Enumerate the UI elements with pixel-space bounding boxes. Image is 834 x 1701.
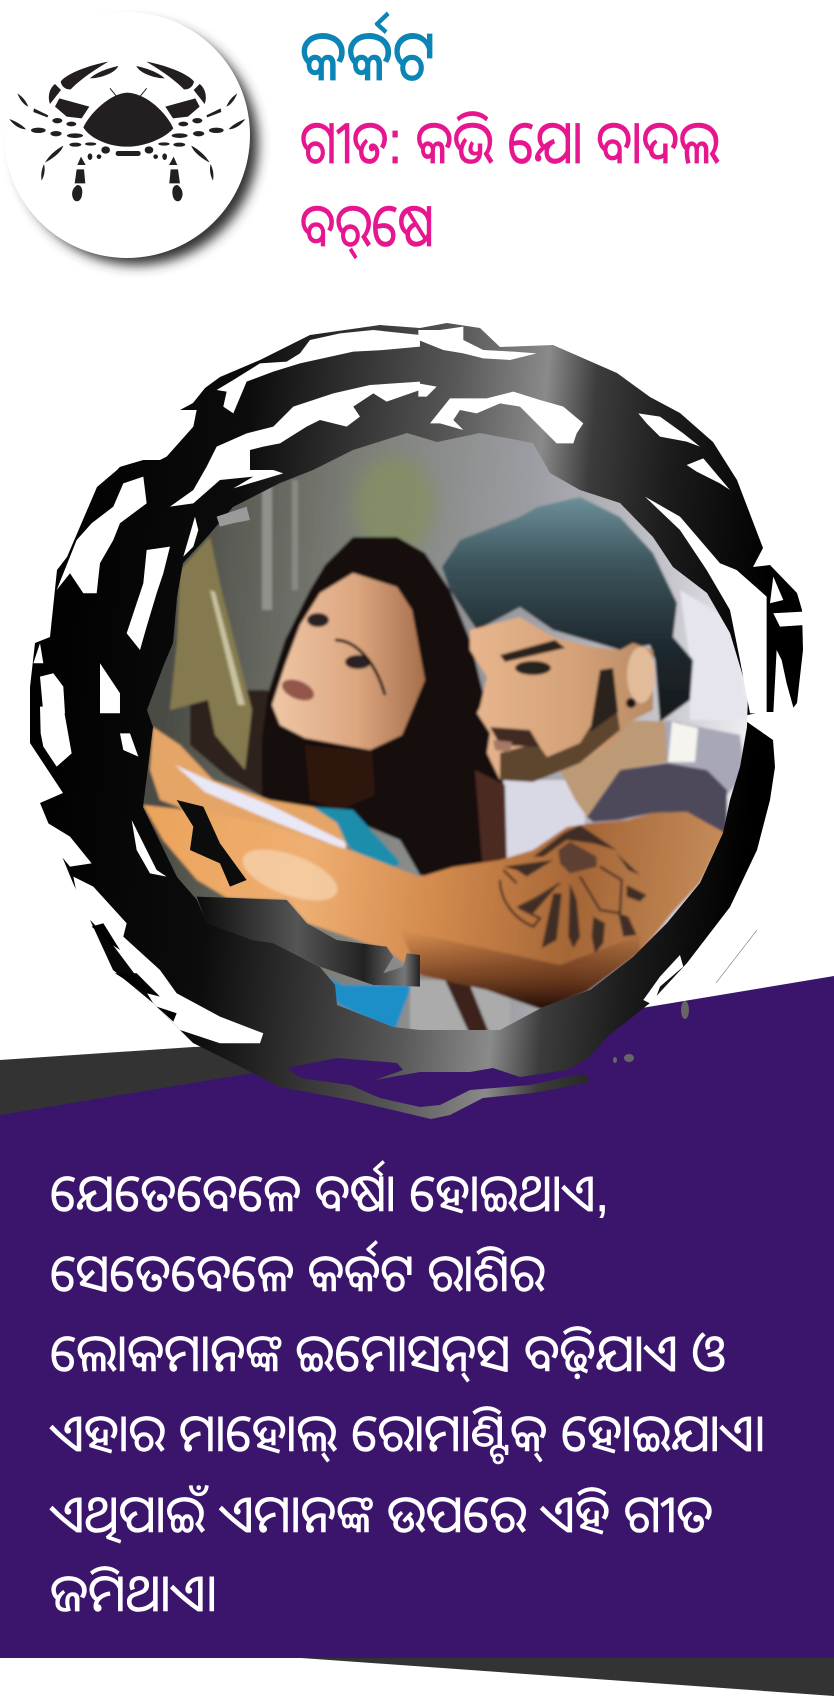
badge disc — [4, 12, 250, 258]
body line 1: ଯେତେବେଳେ ବର୍ଷା ହୋଇଥାଏ, — [50, 1160, 609, 1223]
waterfall beneath chin — [495, 780, 585, 865]
woman's neck — [305, 745, 375, 810]
woman's eyes and lips — [307, 613, 329, 627]
icon: crab — [9, 62, 245, 201]
dark lower strip — [190, 1650, 834, 1696]
tree trunk light — [170, 537, 252, 770]
earring — [626, 698, 636, 708]
body text — [49, 1160, 766, 1623]
body line 5: ଏଥିପାଇଁ ଏମାନଙ୍କ ଉପରେ ଏହି ଗୀତ — [49, 1485, 713, 1544]
song title line 1: ଗୀତ: କଭି ଯୋ ବାଦଲ — [300, 109, 720, 176]
black strip across the arm — [177, 800, 247, 887]
dark brush band across the forearm — [197, 897, 420, 987]
man's shirt — [665, 720, 745, 795]
body line 4: ଏହାର ମାହୋଲ୍‌ ରୋମାଣ୍ଟିକ୍‌ ହୋଇଯାଏ। — [49, 1405, 766, 1464]
purple text panel — [0, 976, 834, 1658]
woman's arm — [150, 727, 348, 847]
man's arm — [143, 805, 725, 1010]
zodiac badge with crab icon — [4, 12, 258, 265]
body line 6: ଜମିଥାଏ। — [50, 1565, 218, 1623]
man's hair — [442, 497, 693, 722]
woman's face — [272, 573, 425, 750]
purple tear in the ring base — [287, 1058, 585, 1107]
brush ring — [30, 323, 803, 1119]
misty forest background — [140, 420, 760, 1040]
foliage — [355, 457, 435, 553]
man's stubble beard — [500, 710, 620, 782]
woman's dress — [313, 807, 400, 880]
torn white patches: lower left — [40, 707, 420, 1043]
torn white patches: upper right — [418, 327, 805, 713]
song title — [300, 109, 720, 259]
body line 2: ସେତେବେଳେ କର୍କଟ ରାଶିର — [50, 1240, 545, 1303]
song title line 2: ବର୍‌ଷେ — [300, 192, 434, 259]
hair wisps and ground — [410, 980, 510, 1035]
body line 3: ଲୋକମାନଙ୍କ ଇମୋସନ୍‌ସ ବଢ଼ିଯାଏ ଓ — [50, 1325, 726, 1383]
man's neck — [560, 720, 690, 817]
circular photo with torn black brush ring — [30, 323, 805, 1119]
man's face — [470, 617, 653, 782]
tattoo — [500, 825, 647, 953]
torn white patch: lower right — [643, 955, 683, 1005]
torn white patches: upper left — [33, 330, 420, 713]
man's eye and brow — [515, 661, 551, 675]
badge shadow — [16, 23, 258, 265]
dark tree trunk — [190, 690, 268, 800]
man's ear — [627, 647, 655, 703]
background bands — [0, 976, 834, 1696]
title: କର୍କଟ — [300, 12, 436, 95]
dark upper band — [0, 1040, 420, 1130]
woman's hair — [262, 537, 505, 885]
waterfall right — [680, 590, 726, 720]
photo — [140, 420, 760, 1040]
brush specks on purple — [613, 1001, 689, 1063]
